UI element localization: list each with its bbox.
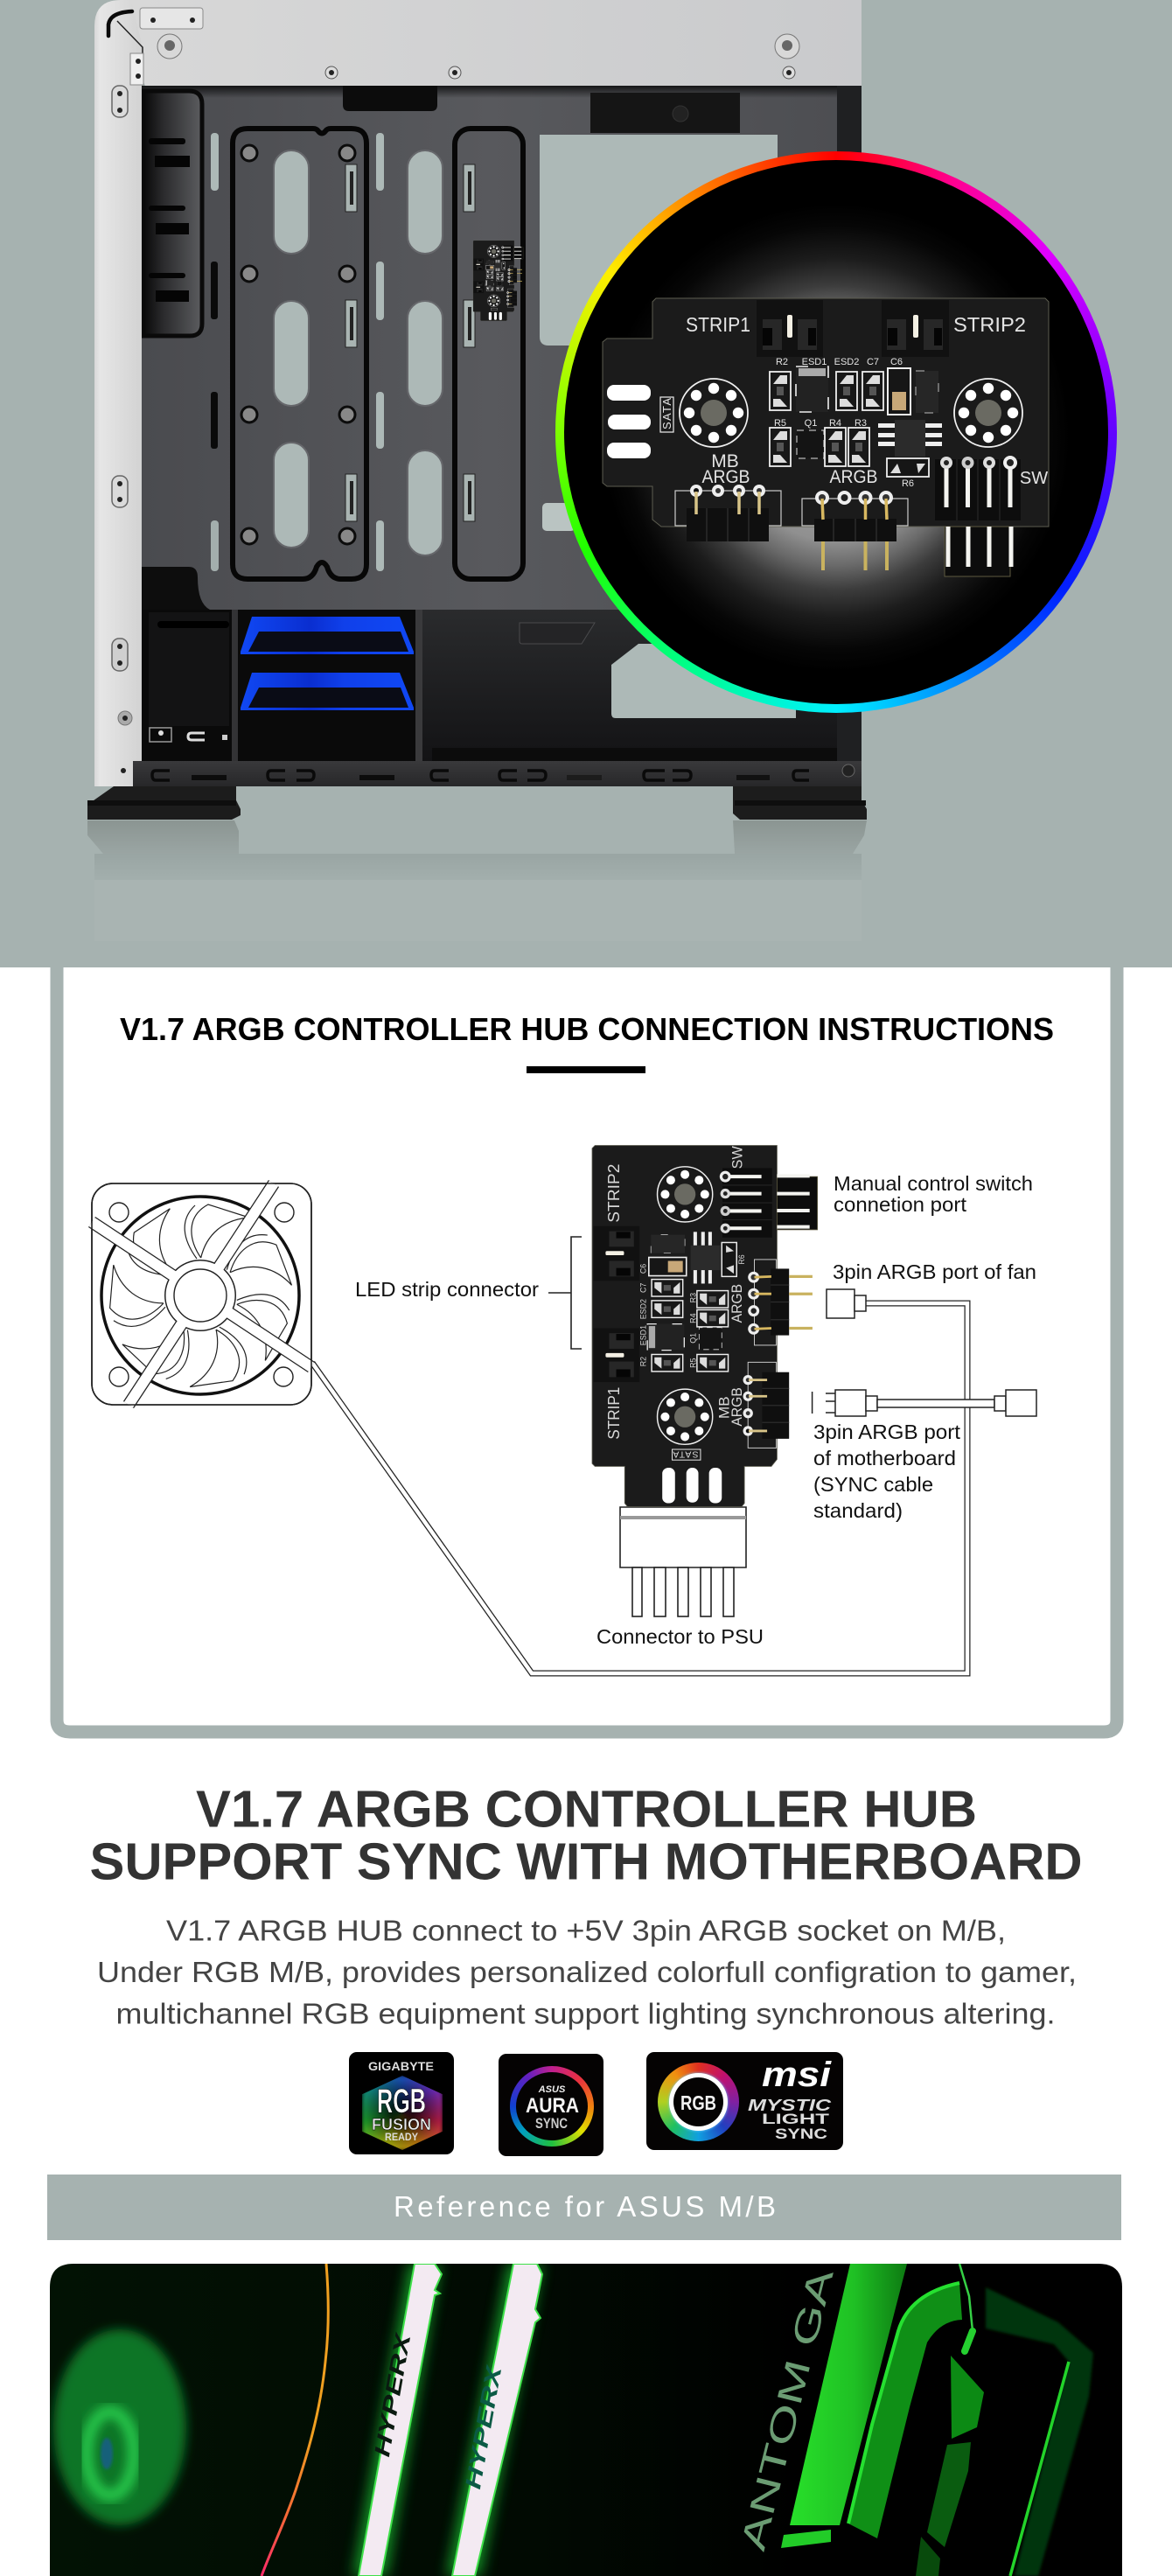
photo: ASUS synced green lighting xyxy=(50,2264,1122,2576)
hub PCB in diagram: R6 xyxy=(737,1254,746,1265)
PCB silkscreen labels: R2 xyxy=(776,357,788,367)
diagram labels: 3pin ARGB port xyxy=(813,1421,961,1443)
Gigabyte logo text: FUSION xyxy=(372,2116,431,2133)
RAM module two: HYPERX xyxy=(461,2363,507,2491)
hub PCB in diagram: MB xyxy=(715,1396,732,1419)
silver left panel xyxy=(94,0,143,786)
GPU shroud curve xyxy=(848,2264,1069,2576)
hub PCB in diagram: R3 xyxy=(688,1293,697,1302)
Aura logo text: SYNC xyxy=(535,2115,568,2132)
PCB silkscreen labels: SATA xyxy=(660,398,673,429)
MSI white ring xyxy=(669,2073,728,2131)
diagram labels xyxy=(596,1172,1036,1648)
case cut-out windows xyxy=(540,135,778,531)
MSI logo text xyxy=(680,2056,832,2142)
hub PCB in diagram: SATA xyxy=(673,1449,699,1459)
bottom rail xyxy=(133,761,862,786)
MSI rainbow ring xyxy=(658,2063,739,2141)
Aura logo text: AURA xyxy=(526,2094,579,2118)
hub PCB in diagram: ARGB xyxy=(729,1284,745,1323)
Gigabyte logo text xyxy=(368,2059,434,2143)
GPU heat pipe xyxy=(781,2264,907,2548)
PCB silkscreen labels: C7 xyxy=(867,357,879,367)
case back plate xyxy=(142,86,837,611)
sync cable with connectors xyxy=(813,1390,1036,1416)
PCB silkscreen labels: STRIP2 xyxy=(953,313,1026,336)
GPU dim shroud xyxy=(986,2287,1093,2576)
main heading: V1.7 ARGB CONTROLLER HUB xyxy=(196,1781,977,1839)
hub PCB in diagram: C7 xyxy=(639,1283,648,1293)
hub PCB in diagram: ESD1 xyxy=(639,1325,648,1345)
hub PCB in diagram: C6 xyxy=(639,1264,648,1274)
PC case illustration xyxy=(87,0,867,866)
Gigabyte logo text: READY xyxy=(385,2131,418,2143)
MSI logo text: MYSTIC xyxy=(748,2097,832,2114)
Gigabyte hex shading xyxy=(362,2076,443,2150)
PCB silkscreen labels xyxy=(660,313,1048,489)
main heading: SUPPORT SYNC WITH MOTHERBOARD xyxy=(89,1833,1083,1891)
PCB silkscreen labels: R5 xyxy=(774,418,786,429)
Aura rainbow ring xyxy=(510,2066,594,2147)
LED strip label: LED strip connector xyxy=(355,1278,539,1301)
PCB silkscreen labels: R6 xyxy=(902,478,914,489)
diagram labels: (SYNC cable xyxy=(813,1473,933,1496)
hub PCB in diagram: STRIP1 xyxy=(604,1387,623,1440)
hub PCB in diagram: R2 xyxy=(639,1357,648,1366)
description paragraph xyxy=(97,1915,1077,2030)
Aura ring centre xyxy=(516,2072,588,2140)
PSU connector illustration xyxy=(620,1507,746,1616)
hero section: case with magnified hub xyxy=(0,0,1172,967)
logo: Gigabyte RGB Fusion xyxy=(349,2052,454,2154)
GPU side panels xyxy=(916,2356,984,2576)
hub PCB in diagram xyxy=(592,1146,818,1507)
GPU branding: ANTOM GA xyxy=(734,2265,841,2554)
diagram and text canvas xyxy=(47,967,1123,2576)
magnified hub PCB xyxy=(602,297,1050,577)
right side rail xyxy=(837,50,862,786)
main heading xyxy=(89,1781,1083,1891)
diagram labels: of motherboard xyxy=(813,1447,956,1470)
MSI logo text: RGB xyxy=(680,2091,716,2114)
diagram labels: standard) xyxy=(813,1499,903,1522)
Gigabyte hex emblem xyxy=(362,2076,443,2150)
logo: MSI Mystic Light Sync xyxy=(646,2052,843,2150)
reference bar xyxy=(47,2175,1121,2240)
RAM module one: HYPERX xyxy=(370,2330,416,2459)
hub PCB in diagram: Q1 xyxy=(688,1333,697,1344)
diagram labels: Manual control switch xyxy=(834,1172,1033,1195)
RGB ring magnifier xyxy=(555,151,1117,713)
Aura logo text xyxy=(526,2084,579,2132)
PCB silkscreen labels: R4 xyxy=(829,418,841,429)
hub PCB in diagram: SW xyxy=(730,1146,746,1169)
icon: cooling fan xyxy=(92,1183,311,1405)
MSI logo text: SYNC xyxy=(775,2126,827,2142)
small hub on back plate xyxy=(473,241,523,321)
case reflection xyxy=(87,820,867,941)
PCB silkscreen labels: STRIP1 xyxy=(686,313,750,336)
diagram labels: Connector to PSU xyxy=(596,1625,764,1648)
PCB silkscreen labels: MB xyxy=(711,451,739,471)
diagram labels: connetion port xyxy=(834,1193,967,1216)
mounting frames and slots xyxy=(211,129,523,579)
PCB silkscreen labels: Q1 xyxy=(805,418,817,429)
hub PCB in diagram: R5 xyxy=(688,1358,697,1368)
panel: connection instructions xyxy=(57,967,1117,1732)
description paragraph: multichannel RGB equipment support lighting synchronous altering. xyxy=(115,1998,1055,2030)
silver top panel xyxy=(122,0,862,86)
reference bar: Reference for ASUS M/B xyxy=(394,2190,776,2223)
MSI logo text: msi xyxy=(762,2056,832,2094)
PCB silkscreen labels: ARGB xyxy=(829,467,878,487)
connection instructions heading: V1.7 ARGB CONTROLLER HUB CONNECTION INSTRUCTIONS xyxy=(120,1011,1054,1047)
LED strip bracket xyxy=(548,1237,582,1349)
PCB silkscreen labels: SW xyxy=(1020,469,1048,488)
RAM module one xyxy=(359,2264,442,2576)
diagram labels: 3pin ARGB port of fan xyxy=(833,1260,1036,1283)
wire from fan to ARGB connector xyxy=(312,1303,967,1673)
logo: ASUS Aura Sync xyxy=(499,2054,603,2156)
description paragraph: V1.7 ARGB HUB connect to +5V 3pin ARGB socket on M/B, xyxy=(166,1915,1006,1947)
hub PCB in diagram: ARGB xyxy=(729,1387,745,1427)
hub PCB in diagram: ESD2 xyxy=(639,1299,648,1319)
PCB silkscreen labels: R3 xyxy=(855,418,867,429)
fan ARGB connector xyxy=(827,1289,866,1318)
heading underline xyxy=(527,1066,645,1073)
Gigabyte logo text: RGB xyxy=(377,2083,426,2120)
Gigabyte logo text: GIGABYTE xyxy=(368,2059,434,2073)
MSI logo text: LIGHT xyxy=(762,2111,830,2127)
hub PCB in diagram: STRIP2 xyxy=(604,1164,623,1223)
PCB silkscreen labels: ARGB xyxy=(701,467,750,487)
lower chamber and fan bay xyxy=(141,610,837,761)
Aura logo text: ASUS xyxy=(538,2084,566,2095)
hub PCB in diagram: R4 xyxy=(688,1313,697,1323)
PCB silkscreen labels: ESD2 xyxy=(834,357,859,367)
case feet xyxy=(87,786,867,820)
RAM glow xyxy=(353,2264,542,2576)
description paragraph: Under RGB M/B, provides personalized colorfull configration to gamer, xyxy=(97,1956,1077,1988)
MSI ring centre xyxy=(673,2077,723,2126)
PCB silkscreen labels: C6 xyxy=(890,357,903,367)
fan glow xyxy=(53,2329,186,2525)
RAM module two xyxy=(452,2264,542,2576)
rainbow wire xyxy=(262,2264,328,2576)
PCB silkscreen labels: ESD1 xyxy=(802,357,827,367)
